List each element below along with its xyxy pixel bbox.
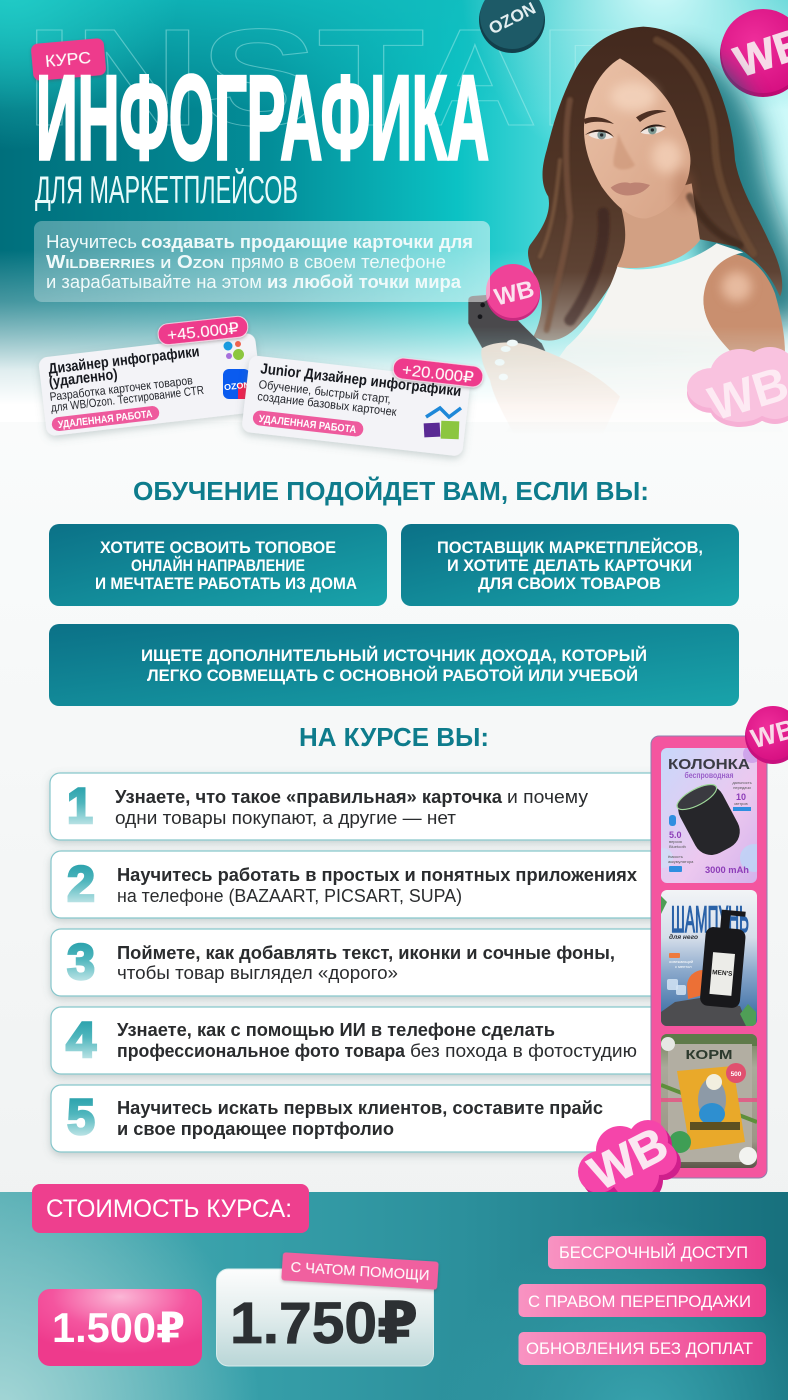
price: 1500	[38, 1289, 202, 1366]
product card: shampoo	[661, 890, 757, 1026]
intro text: Научитесь	[46, 232, 137, 252]
panel: audience 1: И МЕЧТАЕТЕ РАБОТАТЬ ИЗ ДОМА	[95, 574, 357, 593]
price: 1750: 1.750₽	[230, 1291, 418, 1356]
hand	[481, 342, 620, 418]
card: job 2	[241, 355, 471, 457]
step 4: без похода в фотостудию	[410, 1041, 637, 1061]
icon: ozon app: OZON	[224, 380, 250, 392]
feature pill: lifetime access: БЕССРОЧНЫЙ ДОСТУП	[559, 1243, 748, 1262]
icon: growth chart	[424, 408, 461, 439]
hair	[528, 27, 782, 341]
icon: wb badge on phone	[486, 264, 540, 321]
panel: audience 1: ХОТИТЕ ОСВОИТЬ ТОПОВОЕ	[100, 538, 336, 557]
hair strands	[540, 40, 753, 330]
neck	[617, 183, 700, 268]
product card: shampoo: для него	[669, 935, 698, 941]
step 3: Поймете, как добавлять текст, иконки и сочные фоны,	[117, 943, 615, 963]
nose	[613, 133, 635, 170]
card: job 1: (удаленно)	[48, 366, 118, 391]
panel: audience 2	[401, 524, 739, 606]
feature pill: resale right	[518, 1284, 766, 1317]
brows	[583, 117, 614, 124]
product card: speaker: аккумулятора	[668, 859, 694, 864]
price: 1750	[216, 1269, 434, 1366]
card: job 2: Junior Дизайнер инфографики	[260, 360, 462, 400]
card: job 2: Обучение, быстрый старт,	[258, 377, 392, 406]
icon: wb badge on panel corner	[745, 706, 788, 764]
icon: wb badge on phone: WB	[492, 276, 537, 311]
product card: speaker: КОЛОНКА	[668, 756, 750, 773]
step 2: 2	[67, 856, 95, 912]
tag: with help chat: С ЧАТОМ ПОМОЩИ	[290, 1260, 430, 1284]
heading: on the course: НА КУРСЕ ВЫ:	[299, 722, 489, 752]
panel: audience 2: ПОСТАВЩИК МАРКЕТПЛЕЙСОВ,	[437, 538, 703, 557]
tag: salary 45000	[157, 315, 249, 346]
panel: audience 3: ЛЕГКО СОВМЕЩАТЬ С ОСНОВНОЙ РАБОТОЙ ИЛИ УЧЕБОЙ	[147, 666, 638, 685]
step 5: и свое продающее портфолио	[117, 1119, 394, 1139]
step 5	[51, 1085, 671, 1152]
product card: shampoo: освежающий	[669, 959, 693, 964]
step 3	[51, 929, 671, 996]
product card: speaker: версия	[669, 839, 682, 844]
lips	[611, 182, 650, 195]
photo: woman with phone	[468, 27, 788, 440]
product card: speaker: 10	[736, 792, 746, 802]
footer background	[0, 1192, 788, 1400]
icon: wb badge top right	[720, 9, 788, 97]
step 4: Узнаете, как с помощью ИИ в телефоне сделать	[117, 1020, 555, 1040]
badge: course: КУРС	[44, 48, 92, 71]
product card: speaker: передачи	[733, 785, 751, 790]
face	[584, 58, 690, 218]
product card: bird food: КОРМ	[686, 1047, 732, 1062]
step 1	[50, 773, 670, 840]
product card: speaker: метров	[734, 801, 748, 806]
heading: who it is for: ОБУЧЕНИЕ ПОДОЙДЕТ ВАМ, ЕСЛИ ВЫ:	[133, 476, 649, 506]
icon: coloured dots	[224, 341, 244, 360]
card: job 2: УДАЛЕННАЯ РАБОТА	[258, 413, 357, 436]
step 2	[51, 851, 671, 918]
card: job 2: создание базовых карточек	[257, 389, 398, 419]
step 1: Узнаете, что такое «правильная» карточка	[115, 787, 503, 807]
step 1: и почему	[507, 787, 588, 807]
feature pill: lifetime access	[548, 1236, 766, 1269]
panel: audience 1: ОНЛАЙН НАПРАВЛЕНИЕ	[131, 556, 305, 575]
card: job 1: Дизайнер инфографики	[47, 343, 200, 378]
panel: audience 2: И ХОТИТЕ ДЕЛАТЬ КАРТОЧКИ	[447, 556, 692, 575]
eyes	[585, 125, 667, 139]
step 5: 5	[67, 1089, 95, 1145]
feature pill: free updates	[518, 1332, 766, 1365]
step 5: Научитесь искать первых клиентов, составите прайс	[117, 1098, 603, 1118]
card: job 1	[38, 333, 264, 436]
icon: ozon badge	[479, 0, 545, 53]
card: job 1: УДАЛЕННАЯ РАБОТА	[57, 408, 153, 431]
phone	[468, 295, 546, 352]
icon: wb cloud bottom: WB	[581, 1118, 676, 1201]
hero background	[0, 0, 788, 422]
product card: speaker: 3000 mAh	[705, 865, 749, 875]
product card: speaker: 5.0	[669, 830, 682, 840]
step 3: 3	[67, 934, 95, 990]
intro text: из любой точки мира	[267, 272, 462, 292]
product card: speaker	[661, 748, 757, 883]
step 3: чтобы товар выглядел «дорого»	[117, 963, 398, 983]
badge: course	[31, 38, 107, 81]
tag: salary 20000: +20.000₽	[401, 362, 475, 387]
intro text: Wildberries и Ozon	[46, 252, 224, 272]
heading: course price: СТОИМОСТЬ КУРСА:	[46, 1195, 292, 1223]
tag: salary 45000: +45.000₽	[166, 320, 240, 345]
tag: salary 20000	[392, 357, 484, 388]
step 1: 1	[67, 778, 93, 834]
step 4: профессиональное фото товара	[117, 1041, 406, 1061]
icon: ozon badge: OZON	[486, 0, 539, 38]
step 1: одни товары покупают, а другие — нет	[115, 808, 456, 828]
intro text: и зарабатывайте на этом	[46, 272, 262, 292]
feature pill: resale right: С ПРАВОМ ПЕРЕПРОДАЖИ	[528, 1292, 751, 1311]
tag: with help chat	[281, 1252, 439, 1290]
panel: audience 3: ИЩЕТЕ ДОПОЛНИТЕЛЬНЫЙ ИСТОЧНИК ДОХОДА, КОТОРЫЙ	[141, 646, 647, 665]
product card: speaker: беспроводная	[684, 771, 734, 780]
step 4: 4	[66, 1012, 96, 1068]
feature pill: free updates: ОБНОВЛЕНИЯ БЕЗ ДОПЛАТ	[526, 1339, 753, 1358]
subtitle: ДЛЯ МАРКЕТПЛЕЙСОВ	[35, 167, 298, 212]
panel: audience 1	[49, 524, 387, 606]
intro text: прямо в своем телефоне	[231, 252, 446, 272]
product card: speaker: ёмкость	[668, 854, 683, 859]
product card: shampoo: MEN'S	[712, 969, 733, 978]
price: 1500: 1.500₽	[52, 1304, 185, 1351]
heading: course price	[32, 1184, 309, 1233]
product card: bird food: 500	[731, 1071, 742, 1078]
product card: bird food	[661, 1034, 757, 1168]
intro text: создавать продающие карточки для	[141, 232, 473, 252]
product card: speaker: дальность	[732, 780, 752, 785]
icon: ozon app	[223, 369, 250, 399]
outlined background word: INSTAR	[25, 1, 665, 155]
product card: shampoo: с ментол	[675, 964, 692, 969]
card: job 1: Разработка карточек товаров	[49, 373, 193, 404]
intro text box	[34, 221, 490, 302]
intro text	[46, 232, 473, 292]
panel: audience 3	[49, 624, 739, 706]
white top	[560, 243, 744, 369]
step 2: Научитесь работать в простых и понятных приложениях	[117, 865, 637, 885]
product card: speaker: Bluetooth	[669, 844, 686, 849]
shoulder	[703, 254, 785, 358]
panel: product examples	[651, 736, 768, 1178]
step 2: на телефоне (BAZAART, PICSART, SUPA)	[117, 886, 462, 906]
panel: audience 2: ДЛЯ СВОИХ ТОВАРОВ	[478, 574, 661, 593]
step 4	[51, 1007, 671, 1074]
card: job 1: для WB/Ozon. Тестирование CTR	[50, 383, 205, 415]
